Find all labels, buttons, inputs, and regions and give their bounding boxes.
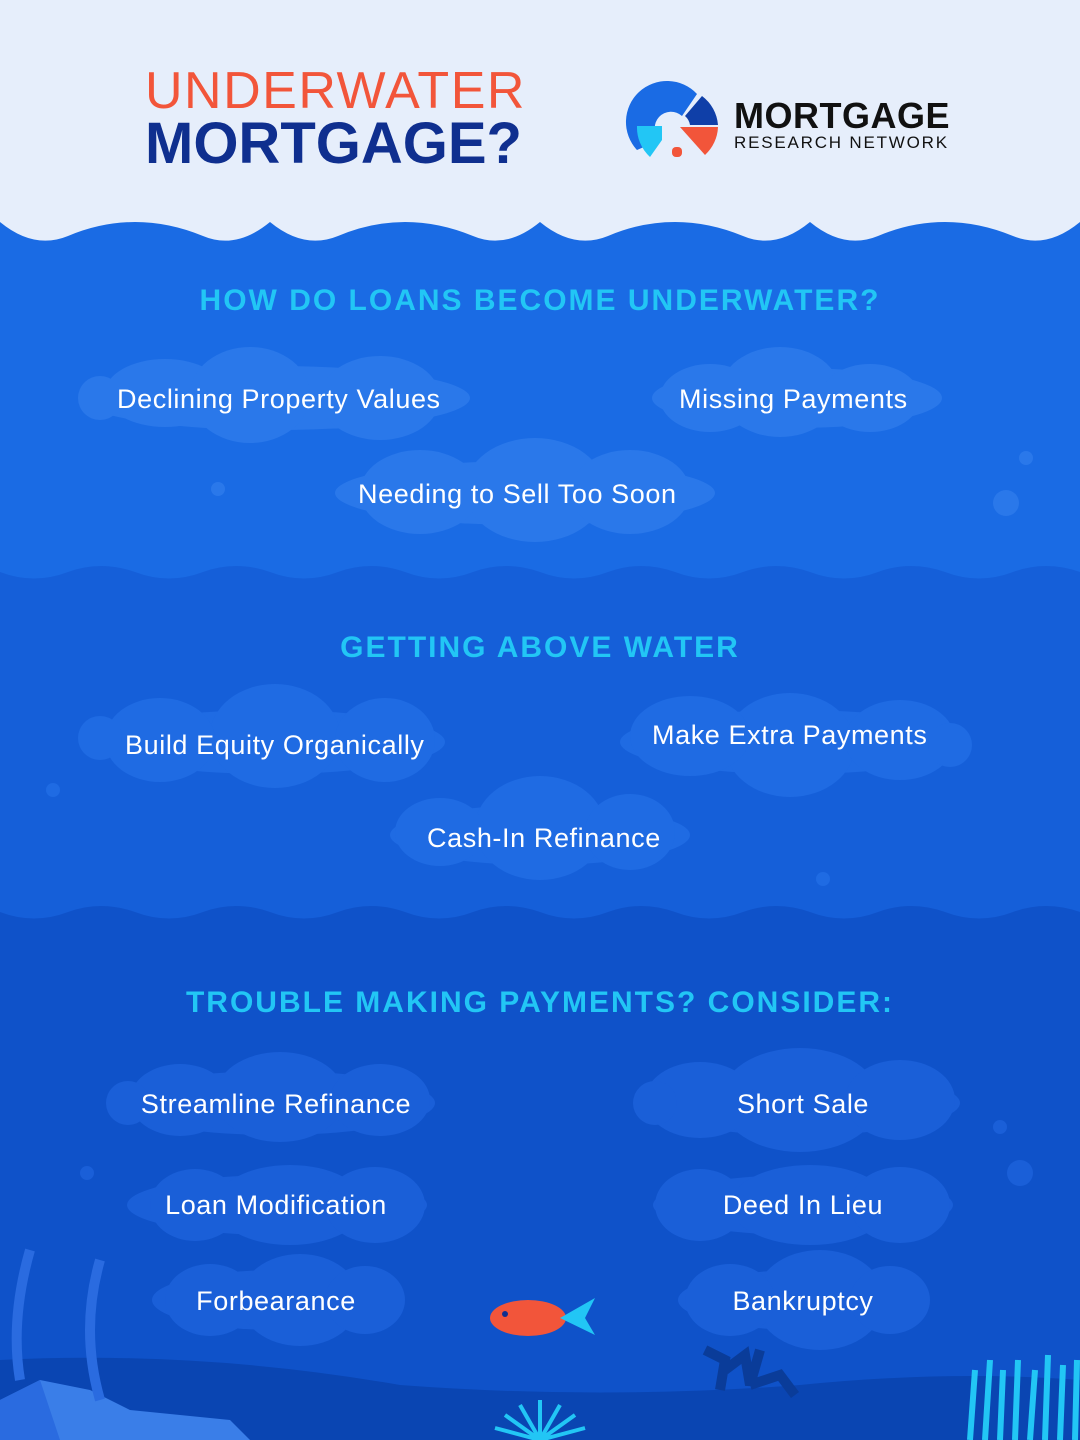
clouds section 3 xyxy=(80,1048,1033,1350)
clouds section 2 xyxy=(46,684,972,886)
clouds section 1 xyxy=(78,347,1033,542)
items section 1: Declining Property Values xyxy=(117,384,441,414)
items section 3 xyxy=(141,1089,883,1316)
items section 1: Missing Payments xyxy=(679,384,908,414)
items section 3: Forbearance xyxy=(196,1286,356,1316)
items section 1: Needing to Sell Too Soon xyxy=(358,479,677,509)
items section 2: Cash-In Refinance xyxy=(427,823,661,853)
items section 3: Streamline Refinance xyxy=(141,1089,411,1119)
items section 3: Short Sale xyxy=(737,1089,869,1119)
items section 3: Bankruptcy xyxy=(732,1286,874,1316)
items section 2: Build Equity Organically xyxy=(125,730,425,760)
water section 3 xyxy=(0,906,1080,1440)
title: MORTGAGE? xyxy=(145,111,522,176)
seabed xyxy=(0,1358,1080,1440)
items section 2: Make Extra Payments xyxy=(652,720,928,750)
background sky xyxy=(0,0,1080,240)
items section 3: Loan Modification xyxy=(165,1190,387,1220)
logo: MORTGAGE xyxy=(734,95,950,136)
icon: fish xyxy=(490,1298,595,1336)
items section 2 xyxy=(125,720,928,853)
logo: RESEARCH NETWORK xyxy=(734,133,949,152)
title: UNDERWATER xyxy=(145,62,526,120)
heading 2: GETTING ABOVE WATER xyxy=(340,631,740,664)
seaweed and rocks xyxy=(0,1250,1077,1440)
heading 3: TROUBLE MAKING PAYMENTS? CONSIDER: xyxy=(186,986,894,1019)
items section 3: Deed In Lieu xyxy=(723,1190,883,1220)
items section 1 xyxy=(117,384,908,509)
logo xyxy=(626,81,950,157)
water section 2 xyxy=(0,566,1080,1440)
title xyxy=(145,62,526,176)
heading 1: HOW DO LOANS BECOME UNDERWATER? xyxy=(200,284,880,317)
